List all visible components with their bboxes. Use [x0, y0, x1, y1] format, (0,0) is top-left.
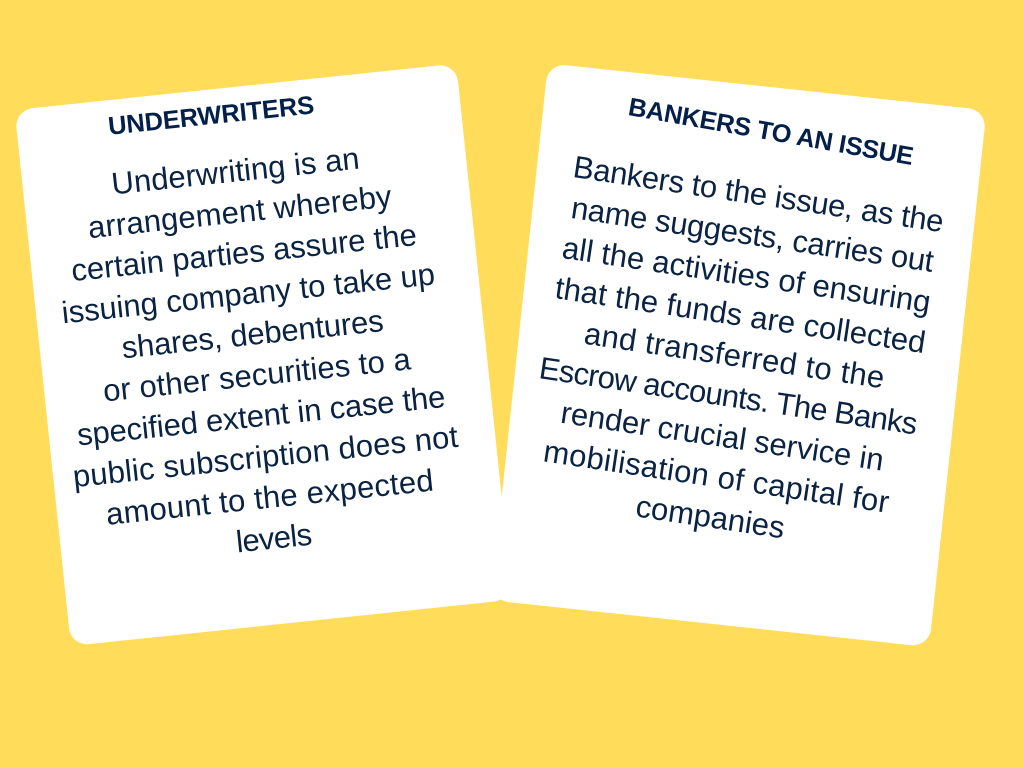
text block: bankers definition: [519, 149, 950, 562]
text block: underwriting definition: levels: [234, 517, 314, 559]
text block: underwriting definition: issuing company to take up: [60, 256, 437, 330]
text block: underwriting definition: or other securities to a: [101, 341, 413, 408]
heading: bankers to an issue: BANKERS TO AN ISSUE: [626, 93, 916, 171]
card: underwriters background: [15, 64, 513, 646]
text block: bankers definition: render crucial service in: [559, 395, 886, 478]
text block: bankers definition: that the funds are collected: [553, 270, 928, 360]
text block: bankers definition: Bankers to the issue, as the: [571, 149, 946, 239]
text block: underwriting definition: arrangement whereby: [86, 178, 394, 245]
text block: underwriting definition: [41, 133, 469, 576]
text block: underwriting definition: shares, debentures: [120, 303, 385, 365]
text block: underwriting definition: amount to the expected: [104, 463, 435, 532]
card: bankers background: [491, 63, 987, 647]
text block: bankers definition: Escrow accounts. The Banks: [537, 350, 920, 441]
text block: bankers definition: and transferred to the: [582, 316, 887, 395]
heading: underwriters: UNDERWRITERS: [107, 91, 316, 141]
text block: underwriting definition: specified extent in case the: [75, 379, 447, 452]
text block: bankers definition: all the activities of ensuring: [560, 230, 933, 320]
text block: underwriting definition: certain parties assure the: [70, 217, 418, 288]
text block: underwriting definition: Underwriting is an: [110, 141, 361, 201]
panel: underwriters: [15, 64, 513, 646]
text block: bankers definition: mobilisation of capital for: [541, 433, 892, 520]
text block: bankers definition: name suggests, carries out: [569, 190, 936, 279]
text block: underwriting definition: public subscription does not: [71, 419, 460, 494]
text block: bankers definition: companies: [634, 489, 787, 545]
panel: bankers to an issue: [491, 63, 987, 647]
